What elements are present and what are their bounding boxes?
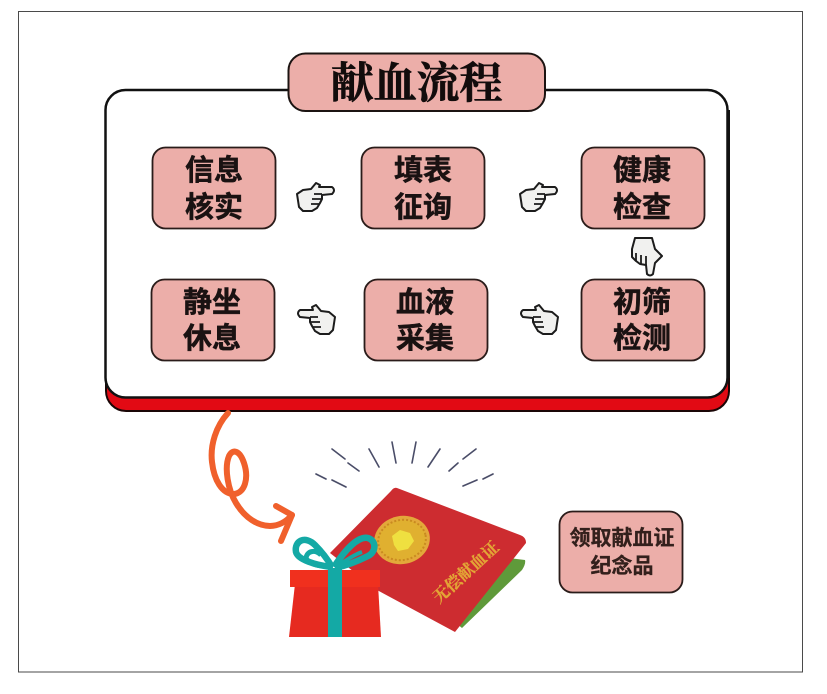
step: 血液采集: 血液	[396, 286, 454, 319]
icon: hand pointing left, between 初筛检测 and 血液采集	[521, 305, 558, 334]
step: 静坐休息: 静坐	[183, 286, 241, 319]
step: 信息核实: 核实	[185, 191, 243, 224]
step: 健康检查	[582, 148, 704, 228]
icon: hand, between 填表征询 and 健康检查	[520, 183, 557, 211]
icon: blood donation certificate booklet	[330, 488, 526, 632]
panel: process card	[106, 90, 730, 411]
step: 血液采集	[364, 280, 488, 360]
step: 填表征询: 填表	[394, 154, 452, 187]
step: 填表征询	[362, 148, 484, 228]
step: 健康检查: 健康	[613, 154, 671, 187]
rays above certificate	[316, 442, 493, 487]
callout: 领取献血证纪念品: 纪念品	[590, 554, 654, 578]
title	[288, 54, 545, 111]
icon: hand pointing left, between 血液采集 and 静坐休息	[298, 305, 335, 334]
step: 血液采集: 采集	[396, 322, 454, 355]
step: 初筛检测: 检测	[613, 322, 671, 355]
icon: blood donation certificate booklet: 无偿献血证	[428, 537, 503, 607]
step: 静坐休息: 休息	[183, 322, 241, 355]
step: 静坐休息	[152, 280, 274, 360]
step: 信息核实: 信息	[185, 154, 243, 187]
icon: hand, between 信息核实 and 填表征询	[297, 183, 334, 211]
step: 初筛检测: 初筛	[613, 286, 671, 319]
step: 填表征询: 征询	[394, 191, 452, 224]
icon: hand pointing down, from 健康检查 to 初筛检测	[632, 238, 662, 276]
icon: gift box	[289, 538, 381, 637]
title: 献血流程	[330, 60, 502, 108]
step: 初筛检测	[582, 280, 704, 360]
step: 信息核实	[152, 148, 276, 228]
arrow: curly orange arrow	[212, 413, 292, 541]
step: 健康检查: 检查	[613, 191, 671, 224]
emblem	[370, 511, 434, 569]
callout: 领取献血证纪念品: 领取献血证	[570, 527, 674, 550]
callout: 领取献血证纪念品	[560, 512, 682, 592]
